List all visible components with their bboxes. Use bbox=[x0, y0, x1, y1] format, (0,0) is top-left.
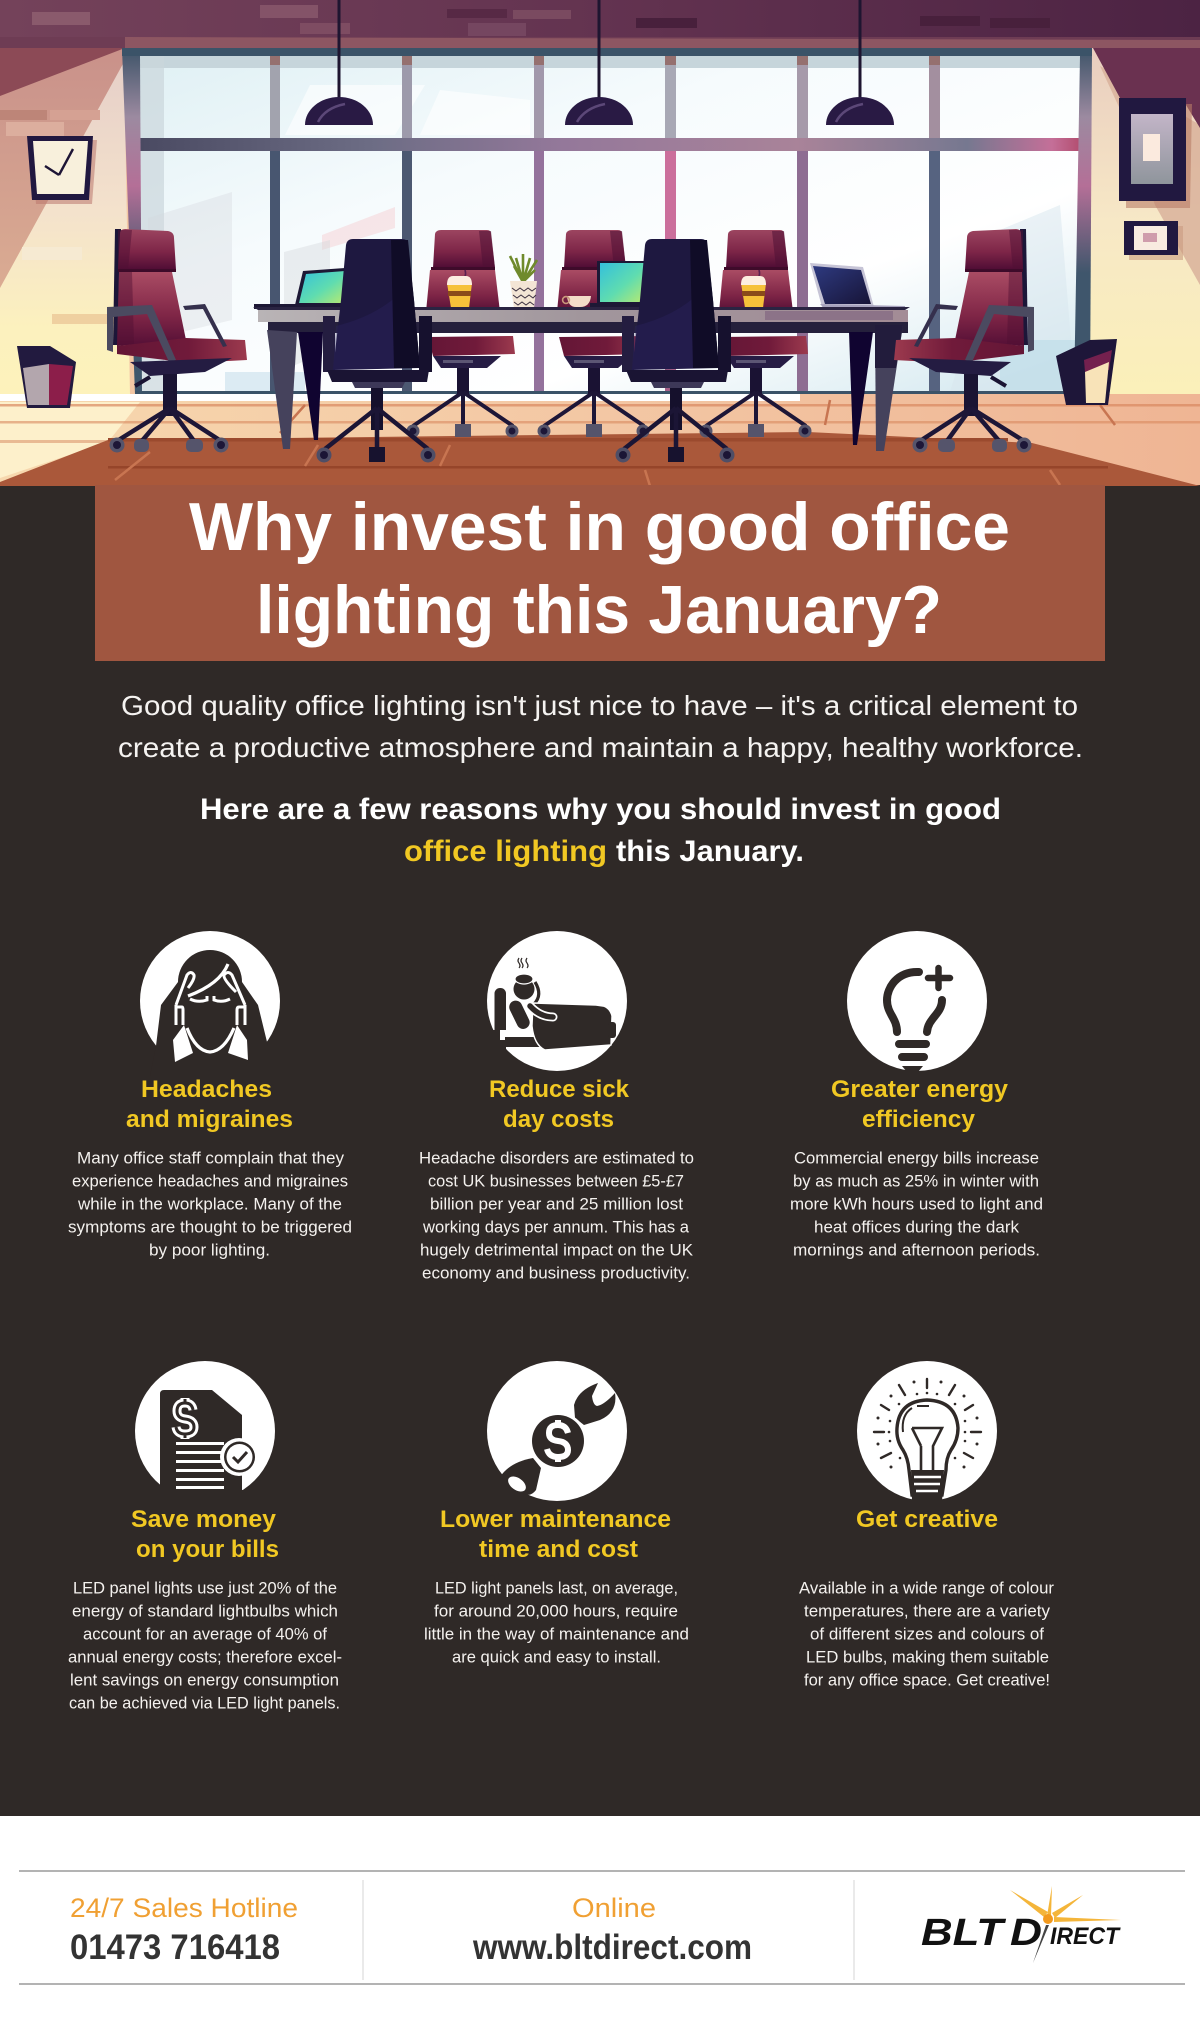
laptop left bbox=[254, 268, 354, 309]
body text bbox=[424, 1580, 689, 1667]
large wall picture bbox=[1119, 98, 1192, 208]
dark content panel bbox=[0, 485, 1200, 1816]
body text bbox=[68, 1150, 352, 1260]
title text: lighting this January? bbox=[256, 572, 942, 648]
body text: by as much as 25% in winter with bbox=[793, 1173, 1039, 1191]
footer: sales hotline: 01473 716418 bbox=[70, 1928, 280, 1967]
heading: Greater energy bbox=[831, 1076, 1009, 1103]
heading: efficiency bbox=[862, 1106, 976, 1133]
front dark chairs bbox=[316, 239, 734, 462]
footer: online: www.bltdirect.com bbox=[472, 1928, 752, 1967]
intro paragraph: Good quality office lighting isn't just nice to have – it's a critical element to bbox=[121, 690, 1078, 721]
heading bbox=[489, 1076, 630, 1133]
intro call to action: Here are a few reasons why you should invest in good bbox=[200, 793, 1001, 826]
teacup bbox=[563, 296, 591, 307]
body text: for any office space. Get creative! bbox=[804, 1672, 1050, 1690]
right side chair bbox=[894, 229, 1034, 452]
laptop middle bbox=[590, 261, 645, 308]
title text: Why invest in good office bbox=[189, 489, 1010, 565]
pendant lamps bbox=[305, 0, 894, 125]
heading: time and cost bbox=[479, 1536, 638, 1563]
footer: online: Online bbox=[572, 1893, 656, 1923]
body text bbox=[790, 1150, 1043, 1260]
body text: Commercial energy bills increase bbox=[794, 1150, 1039, 1168]
window glass bbox=[138, 52, 1082, 396]
footer: sales hotline bbox=[70, 1893, 298, 1967]
footer: BLT Direct logo: IRECT bbox=[1050, 1923, 1121, 1950]
body text: lent savings on energy consumption bbox=[70, 1672, 339, 1690]
body text: LED bulbs, making them suitable bbox=[806, 1649, 1049, 1667]
laptop right bbox=[810, 263, 905, 309]
body text: symptoms are thought to be triggered bbox=[68, 1219, 352, 1237]
body text: heat offices during the dark bbox=[814, 1219, 1020, 1237]
body text: can be achieved via LED light panels. bbox=[69, 1695, 340, 1713]
footer: BLT Direct logo: D bbox=[1010, 1912, 1042, 1954]
icon: sick person in bed bbox=[487, 931, 627, 1071]
heading bbox=[440, 1506, 671, 1563]
ceiling bbox=[0, 0, 1200, 48]
body text: economy and business productivity. bbox=[422, 1265, 690, 1283]
icon: glowing light bulb bbox=[857, 1361, 997, 1502]
body text: more kWh hours used to light and bbox=[790, 1196, 1043, 1214]
heading: and migraines bbox=[126, 1106, 293, 1133]
heading: Reduce sick bbox=[489, 1076, 630, 1103]
body text: billion per year and 25 million lost bbox=[430, 1196, 683, 1214]
body text: Headache disorders are estimated to bbox=[419, 1150, 694, 1168]
right wall bbox=[1090, 46, 1200, 395]
heading: day costs bbox=[503, 1106, 614, 1133]
footer: BLT Direct logo: BLT bbox=[921, 1912, 1006, 1954]
waste bin left bbox=[17, 346, 76, 408]
rear red chairs bbox=[406, 230, 812, 438]
icon: wrench and dollar coin bbox=[487, 1361, 627, 1501]
intro paragraph bbox=[118, 690, 1083, 763]
footer rules bbox=[19, 1870, 1185, 1985]
body text: Available in a wide range of colour bbox=[799, 1580, 1055, 1598]
potted plant bbox=[510, 254, 537, 308]
window mullions and frame bbox=[122, 48, 1092, 394]
body text: by poor lighting. bbox=[149, 1242, 270, 1260]
heading bbox=[131, 1506, 279, 1563]
body text: experience headaches and migraines bbox=[72, 1173, 348, 1191]
body text bbox=[68, 1580, 342, 1713]
conference table bbox=[253, 307, 910, 451]
title banner bbox=[95, 485, 1105, 661]
waste bin right bbox=[1056, 339, 1117, 405]
icon: bill document with check badge bbox=[135, 1361, 275, 1510]
body text: energy of standard lightbulbs which bbox=[72, 1603, 338, 1621]
body text: hugely detrimental impact on the UK bbox=[420, 1242, 693, 1260]
panel: lower maintenance time and cost bbox=[424, 1361, 689, 1667]
body text: Many office staff complain that they bbox=[77, 1150, 345, 1168]
hero illustration: office meeting room bbox=[0, 0, 1200, 486]
footer: sales hotline: 24/7 Sales Hotline bbox=[70, 1893, 298, 1923]
title text bbox=[189, 489, 1010, 648]
body text bbox=[799, 1580, 1055, 1690]
footer: online bbox=[472, 1893, 752, 1967]
body text: are quick and easy to install. bbox=[452, 1649, 661, 1667]
panel: headaches and migraines bbox=[68, 931, 352, 1260]
heading bbox=[126, 1076, 293, 1133]
heading: on your bills bbox=[136, 1536, 279, 1563]
left side chair bbox=[107, 229, 247, 452]
panel: greater energy efficiency bbox=[790, 931, 1043, 1260]
intro call to action: this January. bbox=[616, 835, 804, 868]
heading: Headaches bbox=[141, 1076, 272, 1103]
body text: cost UK businesses between £5-£7 bbox=[428, 1173, 684, 1191]
body text: annual energy costs; therefore excel- bbox=[68, 1649, 342, 1667]
panel: get creative bbox=[799, 1361, 1055, 1690]
body text: working days per annum. This has a bbox=[422, 1219, 690, 1237]
body text: for around 20,000 hours, require bbox=[434, 1603, 678, 1621]
body text: account for an average of 40% of bbox=[83, 1626, 327, 1644]
coffee cups bbox=[447, 270, 766, 308]
body text: while in the workplace. Many of the bbox=[77, 1196, 342, 1214]
intro call to action: office lighting bbox=[404, 835, 607, 868]
body text: little in the way of maintenance and bbox=[424, 1626, 689, 1644]
small wall picture bbox=[1124, 221, 1183, 260]
body text: LED light panels last, on average, bbox=[435, 1580, 678, 1598]
left wall bbox=[0, 42, 130, 395]
body text: LED panel lights use just 20% of the bbox=[73, 1580, 337, 1598]
heading: Lower maintenance bbox=[440, 1506, 671, 1533]
icon: head with hands at temples bbox=[140, 931, 280, 1076]
footer: BLT Direct logo bbox=[921, 1886, 1121, 1963]
heading: Get creative bbox=[856, 1506, 998, 1533]
body text bbox=[419, 1150, 694, 1283]
wall clock bbox=[27, 136, 97, 204]
heading bbox=[831, 1076, 1009, 1133]
panel: reduce sick day costs bbox=[419, 931, 694, 1283]
body text: temperatures, there are a variety bbox=[804, 1603, 1051, 1621]
panel: save money on your bills bbox=[68, 1361, 342, 1713]
icon: light bulb with plus bbox=[847, 931, 987, 1072]
body text: mornings and afternoon periods. bbox=[793, 1242, 1040, 1260]
floor bbox=[0, 394, 1200, 486]
intro call to action bbox=[200, 793, 1001, 868]
heading: Save money bbox=[131, 1506, 277, 1533]
intro paragraph: create a productive atmosphere and maintain a happy, healthy workforce. bbox=[118, 732, 1083, 763]
body text: of different sizes and colours of bbox=[810, 1626, 1044, 1644]
